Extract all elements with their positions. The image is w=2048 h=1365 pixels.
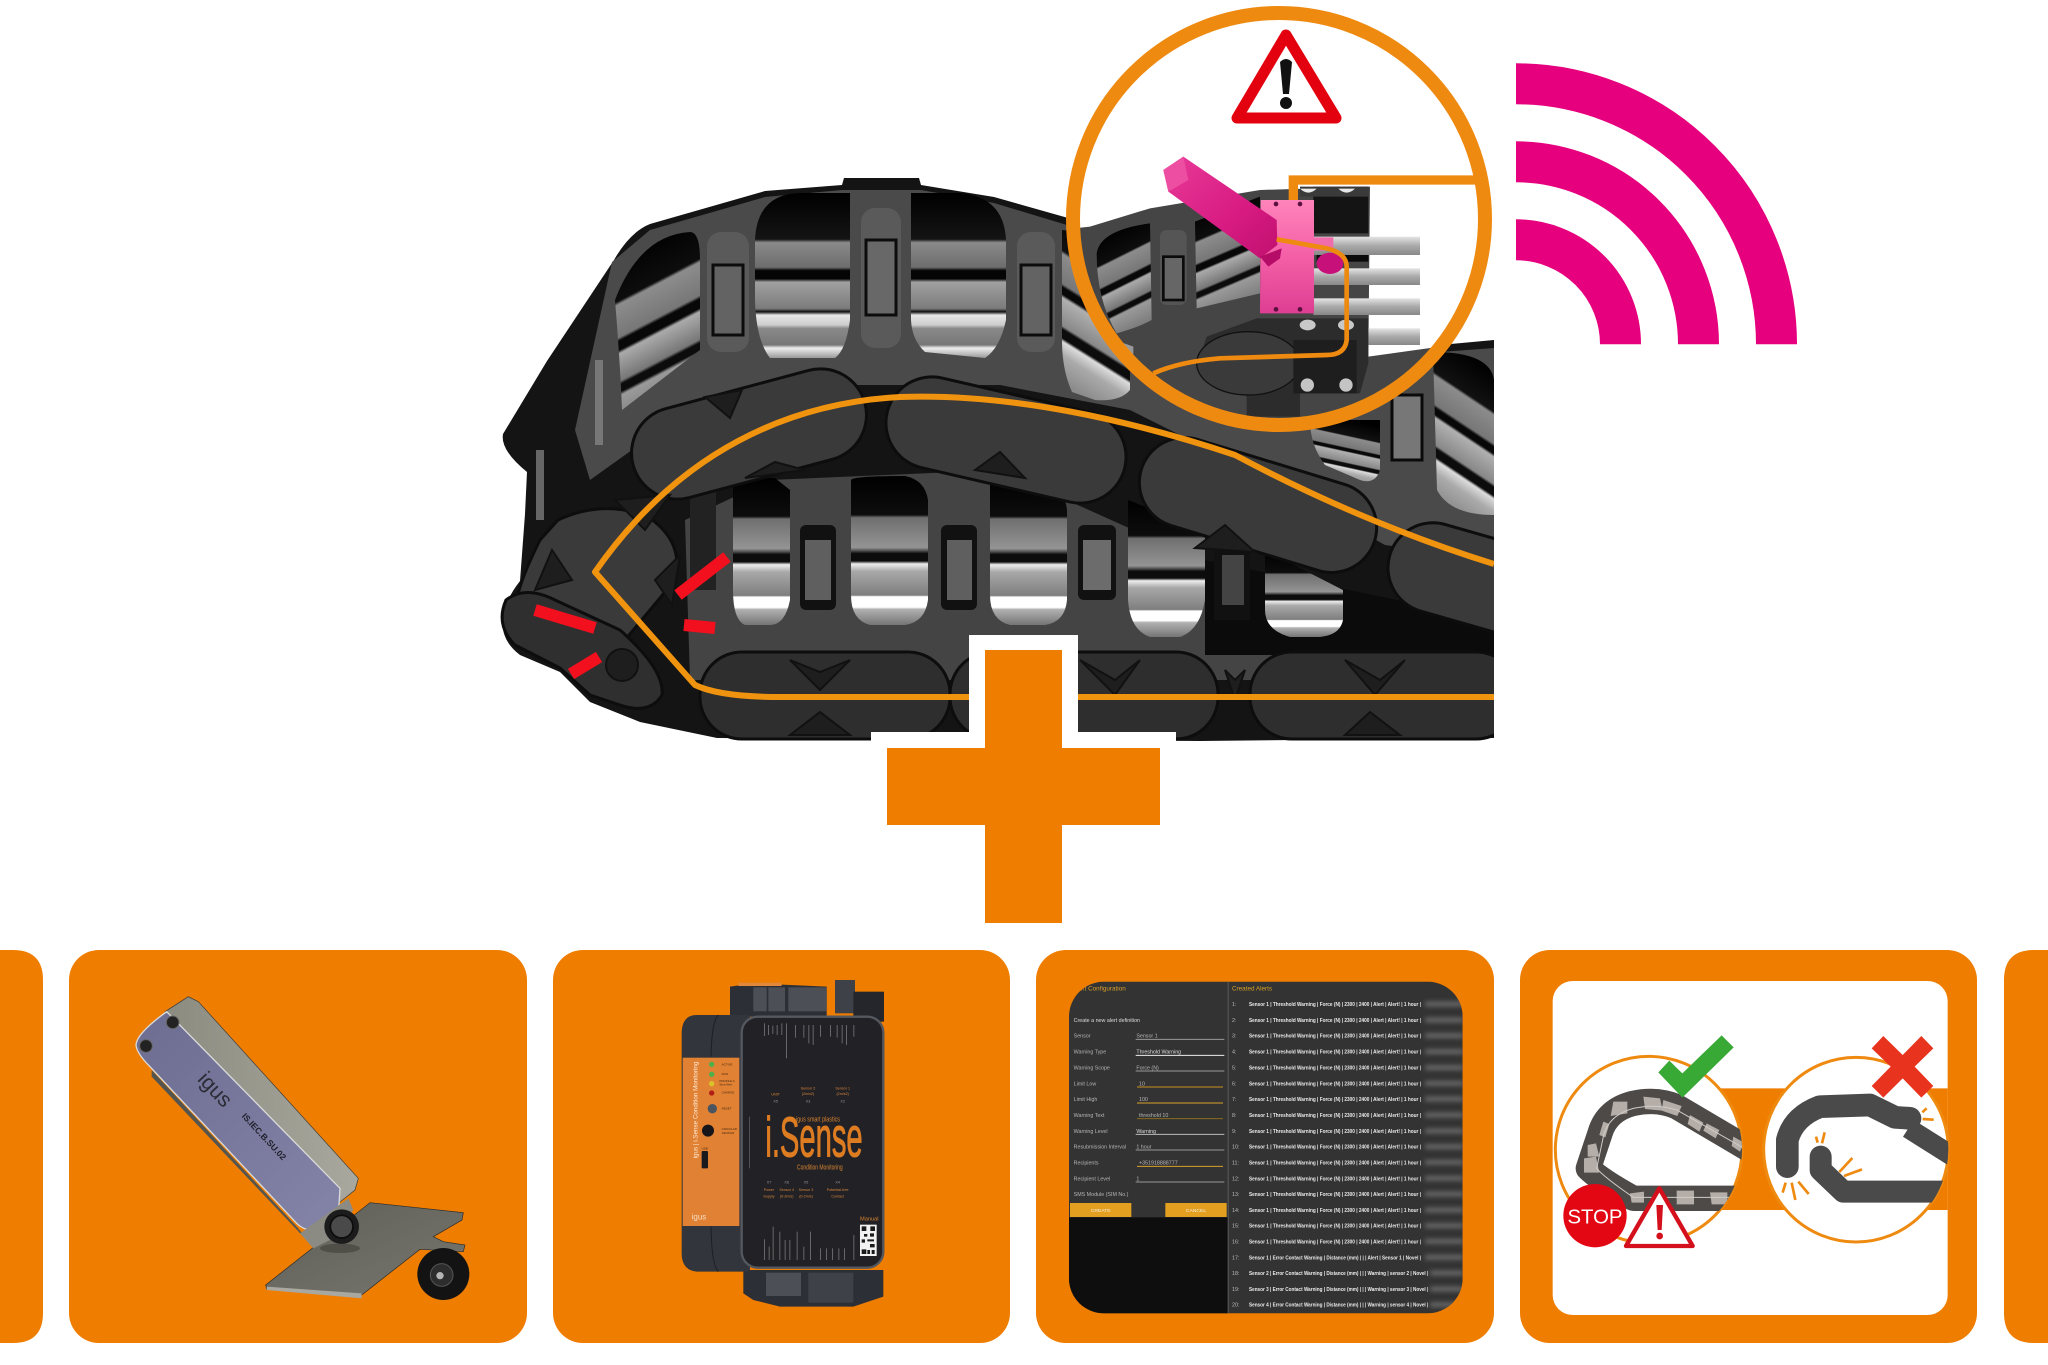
front face <box>742 1017 883 1268</box>
side housing <box>682 1015 750 1272</box>
warning sign <box>1626 1188 1693 1246</box>
plus sign <box>871 635 1176 923</box>
created alerts list: 1: <box>1232 1002 1236 1008</box>
upper link slots <box>536 208 1055 520</box>
i.Sense wordmark: i.Sense <box>765 1107 863 1170</box>
lower black area <box>1069 1217 1228 1313</box>
upper window 4 <box>1062 230 1130 400</box>
alert configuration form: Sensor <box>1074 1034 1091 1040</box>
created alerts list: 6: <box>1232 1081 1236 1087</box>
alert configuration form: Resubmission Interval <box>1074 1145 1126 1151</box>
chain in inset <box>1080 186 1431 418</box>
green check mark <box>1658 1035 1734 1098</box>
created alerts list: 3: <box>1232 1034 1236 1040</box>
micro pin labels <box>749 1023 854 1260</box>
created alerts list: Sensor 1 | Threshold Warning | Force (N) | 2300 | 2400 | Alert | Alert! | 1 hour | <box>1249 1018 1421 1024</box>
upper window 2 <box>755 193 850 358</box>
bracket <box>300 1198 353 1248</box>
QR code <box>860 1225 877 1256</box>
pink sensor plate <box>1260 200 1314 313</box>
white card <box>1553 981 1948 1315</box>
broken chain top section <box>1787 1105 1910 1167</box>
orange side label <box>683 1058 739 1226</box>
chain centre line <box>1597 1106 1750 1197</box>
created alerts list: 8: <box>1232 1113 1236 1119</box>
created alerts list: 11: <box>1232 1160 1239 1166</box>
alert configuration form: 100 <box>1139 1097 1148 1103</box>
orange ring <box>1073 13 1485 425</box>
link markings <box>535 390 1405 735</box>
panel: good versus broken chain <box>1520 950 1977 1343</box>
alert configuration form: Force (N) <box>1136 1066 1159 1072</box>
smart plastics heading: igus smart plastics <box>796 1117 840 1124</box>
panel: alert software screen <box>1036 950 1494 1343</box>
created alerts list: Sensor 1 | Threshold Warning | Force (N) | 2300 | 2400 | Alert | Alert! | 1 hour | <box>1249 1097 1421 1103</box>
label captions: RESET <box>722 1106 732 1110</box>
column divider <box>1228 982 1229 1313</box>
inset close-up of chain and sensor <box>1080 156 1475 418</box>
upper left dark window <box>615 232 700 410</box>
front top labels: Sensor 1 <box>835 1086 850 1090</box>
panel: i.Sense controller <box>553 950 1010 1343</box>
created alerts list: 18: <box>1232 1271 1239 1277</box>
label captions: ACTIVE <box>722 1062 732 1066</box>
label captions: SENSOR <box>722 1131 735 1135</box>
cable strips <box>1313 237 1420 345</box>
front bottom labels: (0-2m/s) <box>799 1195 813 1199</box>
broken chain bottom section <box>1821 1157 1947 1192</box>
inset white background <box>1073 13 1485 425</box>
chain plates <box>1584 1097 1744 1204</box>
inset magnifier circle <box>1060 13 1485 433</box>
created alerts list: 5: <box>1232 1066 1236 1072</box>
alert configuration form: Create a new alert definition <box>1074 1018 1140 1024</box>
sensor housing face <box>136 1012 340 1229</box>
front bottom labels: X7 <box>767 1181 771 1185</box>
blurred private column <box>1425 1002 1463 1307</box>
front bottom labels: (0-2m/s) <box>780 1195 793 1199</box>
form field underlines <box>1136 1039 1224 1182</box>
alert configuration form: 10 <box>1139 1081 1145 1087</box>
created alerts list: Sensor 1 | Threshold Warning | Force (N) | 2300 | 2400 | Alert | Alert! | 1 hour | <box>1249 1145 1421 1151</box>
created alerts list: Sensor 1 | Threshold Warning | Force (N) | 2300 | 2400 | Alert | Alert! | 1 hour | <box>1249 1208 1421 1214</box>
front top labels <box>771 1086 850 1104</box>
created alerts list: Sensor 1 | Threshold Warning | Force (N) | 2300 | 2400 | Alert | Alert! | 1 hour | <box>1249 1081 1421 1087</box>
alert configuration form: Warning <box>1136 1129 1156 1135</box>
created alerts heading: Created Alerts <box>1232 986 1272 993</box>
igus logo: igus <box>193 1067 237 1112</box>
lower windows <box>690 476 1343 637</box>
manual label: Manual <box>860 1217 879 1223</box>
label captions: Sent Alert <box>719 1082 732 1086</box>
impact marks <box>1783 1108 1934 1200</box>
housing screws <box>166 1016 179 1029</box>
front bottom labels: Potential-free <box>827 1188 849 1192</box>
created alerts list: Sensor 1 | Error Contact Warning | Distance (mm) | | | Alert | Sensor 1 | Novel | <box>1249 1255 1421 1261</box>
alert configuration form: SMS Module (SIM No.) <box>1074 1192 1129 1198</box>
alert configuration form: Warning Level <box>1074 1129 1108 1135</box>
red cross <box>1872 1036 1933 1098</box>
upper window 3 <box>911 193 1006 358</box>
created alerts list: Sensor 2 | Error Contact Warning | Distance (mm) | | | Warning | sensor 2 | Novel | <box>1249 1271 1429 1277</box>
created alerts list: 12: <box>1232 1176 1239 1182</box>
created alerts list: Sensor 1 | Threshold Warning | Force (N) | 2300 | 2400 | Alert | Alert! | 1 hour | <box>1249 1034 1421 1040</box>
bottom terminals <box>743 1270 883 1307</box>
created alerts list: Sensor 1 | Threshold Warning | Force (N) | 2300 | 2400 | Alert | Alert! | 1 hour | <box>1249 1224 1421 1230</box>
screen background <box>1069 982 1463 1313</box>
upper strand frame <box>575 190 1494 560</box>
vertical side label: igus | i.Sense Condition Monitoring <box>692 1061 699 1158</box>
front bottom labels: X5 <box>804 1181 808 1185</box>
alert configuration form: Recipients <box>1074 1160 1099 1166</box>
igus label: igus <box>692 1212 706 1221</box>
lower strand frame <box>685 472 1272 680</box>
lower right dark area <box>1205 560 1494 655</box>
panel: sensor hardware <box>69 950 527 1343</box>
created alerts list: Sensor 4 | Error Contact Warning | Distance (mm) | | | Warning | sensor 4 | Novel | <box>1249 1303 1429 1309</box>
alert configuration form: threshold 10 <box>1139 1113 1168 1119</box>
created alerts list: Sensor 1 | Threshold Warning | Force (N) | 2300 | 2400 | Alert | Alert! | 1 hour | <box>1249 1050 1421 1056</box>
created alerts list: Sensor 1 | Threshold Warning | Force (N) | 2300 | 2400 | Alert | Alert! | 1 hour | <box>1249 1129 1421 1135</box>
side links <box>502 359 1637 739</box>
alert configuration form: Sensor 1 <box>1136 1034 1158 1040</box>
stop sign <box>1563 1184 1627 1247</box>
created alerts list: 2: <box>1232 1018 1236 1024</box>
wireless signal arcs <box>1516 84 1776 344</box>
sensor housing side <box>165 997 358 1203</box>
created alerts list: Sensor 1 | Threshold Warning | Force (N) | 2300 | 2400 | Alert | Alert! | 1 hour | <box>1249 1239 1421 1245</box>
created alerts list: Sensor 3 | Error Contact Warning | Distance (mm) | | | Warning | sensor 3 | Novel | <box>1249 1287 1429 1293</box>
created alerts list: 15: <box>1232 1224 1239 1230</box>
lower bracket <box>1197 318 1368 417</box>
created alerts list: 14: <box>1232 1208 1239 1214</box>
right partial panel <box>2004 950 2048 1343</box>
created alerts list: 19: <box>1232 1287 1239 1293</box>
right upper windows <box>1310 420 1380 481</box>
left partial panel <box>0 950 43 1343</box>
lower slots <box>800 525 1244 610</box>
alert configuration form <box>1073 986 1181 1198</box>
alert configuration form: Alert Configuration <box>1073 986 1126 993</box>
alert configuration form: Limit High <box>1074 1097 1097 1103</box>
front top labels: X3 <box>806 1100 810 1104</box>
alert configuration form: 1 hour <box>1136 1145 1152 1151</box>
created alerts list: 20: <box>1232 1303 1239 1309</box>
chain silhouette <box>503 178 1494 741</box>
created alerts list: 10: <box>1232 1145 1239 1151</box>
front bottom labels: Sensor 3 <box>799 1188 813 1192</box>
label captions: USB <box>702 1146 708 1150</box>
created alerts list <box>1232 1002 1429 1309</box>
energy chain illustration <box>500 178 1494 741</box>
alert configuration form: 1 <box>1136 1176 1139 1182</box>
created alerts list: Sensor 1 | Threshold Warning | Force (N) | 2300 | 2400 | Alert | Alert! | 1 hour | <box>1249 1002 1421 1008</box>
form buttons <box>1070 1203 1227 1217</box>
label captions <box>702 1062 738 1150</box>
mounting plate <box>266 1203 465 1295</box>
front top labels: (2m/s2) <box>802 1092 814 1096</box>
orange wires <box>1293 180 1477 200</box>
created alerts list: 13: <box>1232 1192 1239 1198</box>
created alerts list: Sensor 1 | Threshold Warning | Force (N) | 2300 | 2400 | Alert | Alert! | 1 hour | <box>1249 1066 1421 1072</box>
created alerts list: Sensor 1 | Threshold Warning | Force (N) | 2300 | 2400 | Alert | Alert! | 1 hour | <box>1249 1113 1421 1119</box>
alert configuration form: Warning Scope <box>1074 1066 1110 1072</box>
inset windows <box>1097 223 1152 333</box>
front bottom labels: Contact <box>831 1195 844 1199</box>
created alerts list: 9: <box>1232 1129 1236 1135</box>
pink tab and roller <box>1313 237 1333 251</box>
intact chain <box>1588 1101 1750 1198</box>
warning triangle <box>1237 35 1336 118</box>
created alerts list: 4: <box>1232 1050 1236 1056</box>
front top labels: X2 <box>840 1100 845 1104</box>
front bottom labels: X4 <box>835 1181 840 1185</box>
top bracket <box>1313 187 1368 233</box>
circle: good chain <box>1555 1056 1750 1243</box>
front bottom labels: Sensor 4 <box>779 1188 794 1192</box>
front bottom labels: Supply <box>763 1195 775 1199</box>
label captions: CHARGE <box>722 1091 734 1095</box>
stop sign: STOP <box>1567 1205 1622 1228</box>
front bottom labels <box>763 1181 849 1199</box>
created alerts list: 17: <box>1232 1255 1239 1261</box>
alert configuration form: Warning Text <box>1074 1113 1105 1119</box>
form buttons: CANCEL <box>1186 1208 1206 1214</box>
orange cable outline <box>595 397 1494 697</box>
orange band <box>1707 1088 1948 1210</box>
alert configuration form: +351918888777 <box>1139 1160 1178 1166</box>
part number: IS.IEC.B.SU.02 <box>240 1111 288 1162</box>
created alerts list: Sensor 1 | Threshold Warning | Force (N) | 2300 | 2400 | Alert | Alert! | 1 hour | <box>1249 1160 1421 1166</box>
housing seam <box>711 1015 718 1272</box>
front top labels: X5 <box>773 1100 778 1104</box>
connector <box>324 1209 359 1244</box>
alert configuration form: Recipient Level <box>1074 1176 1110 1182</box>
label captions: RUN <box>722 1072 728 1076</box>
wheel <box>417 1248 469 1300</box>
top terminals <box>730 983 827 1017</box>
condition monitoring: Condition Monitoring <box>797 1162 843 1171</box>
alert configuration form: Limit Low <box>1074 1081 1096 1087</box>
front top labels: Sensor 2 <box>801 1086 815 1090</box>
label LEDs <box>702 1062 717 1168</box>
created alerts list: 16: <box>1232 1239 1239 1245</box>
label captions: CIRCULAR <box>722 1127 738 1131</box>
label captions: PROFILE A <box>719 1079 735 1083</box>
pink sensor arm <box>1163 157 1277 258</box>
alert configuration form: Threshold Warning <box>1136 1050 1181 1056</box>
created alerts list: 7: <box>1232 1097 1236 1103</box>
front bottom labels: Power <box>764 1188 775 1192</box>
red damage marks <box>535 557 727 674</box>
front top labels: (2m/s2) <box>836 1092 849 1096</box>
front top labels: UNIT <box>771 1093 781 1097</box>
created alerts list: Sensor 1 | Threshold Warning | Force (N) | 2300 | 2400 | Alert | Alert! | 1 hour | <box>1249 1176 1421 1182</box>
alert configuration form: Warning Type <box>1074 1050 1106 1056</box>
front bottom labels: X6 <box>784 1181 789 1185</box>
form buttons: CREATE <box>1091 1208 1111 1214</box>
created alerts list: Sensor 1 | Threshold Warning | Force (N) | 2300 | 2400 | Alert | Alert! | 1 hour | <box>1249 1192 1421 1198</box>
circle: broken chain <box>1764 1057 1953 1242</box>
